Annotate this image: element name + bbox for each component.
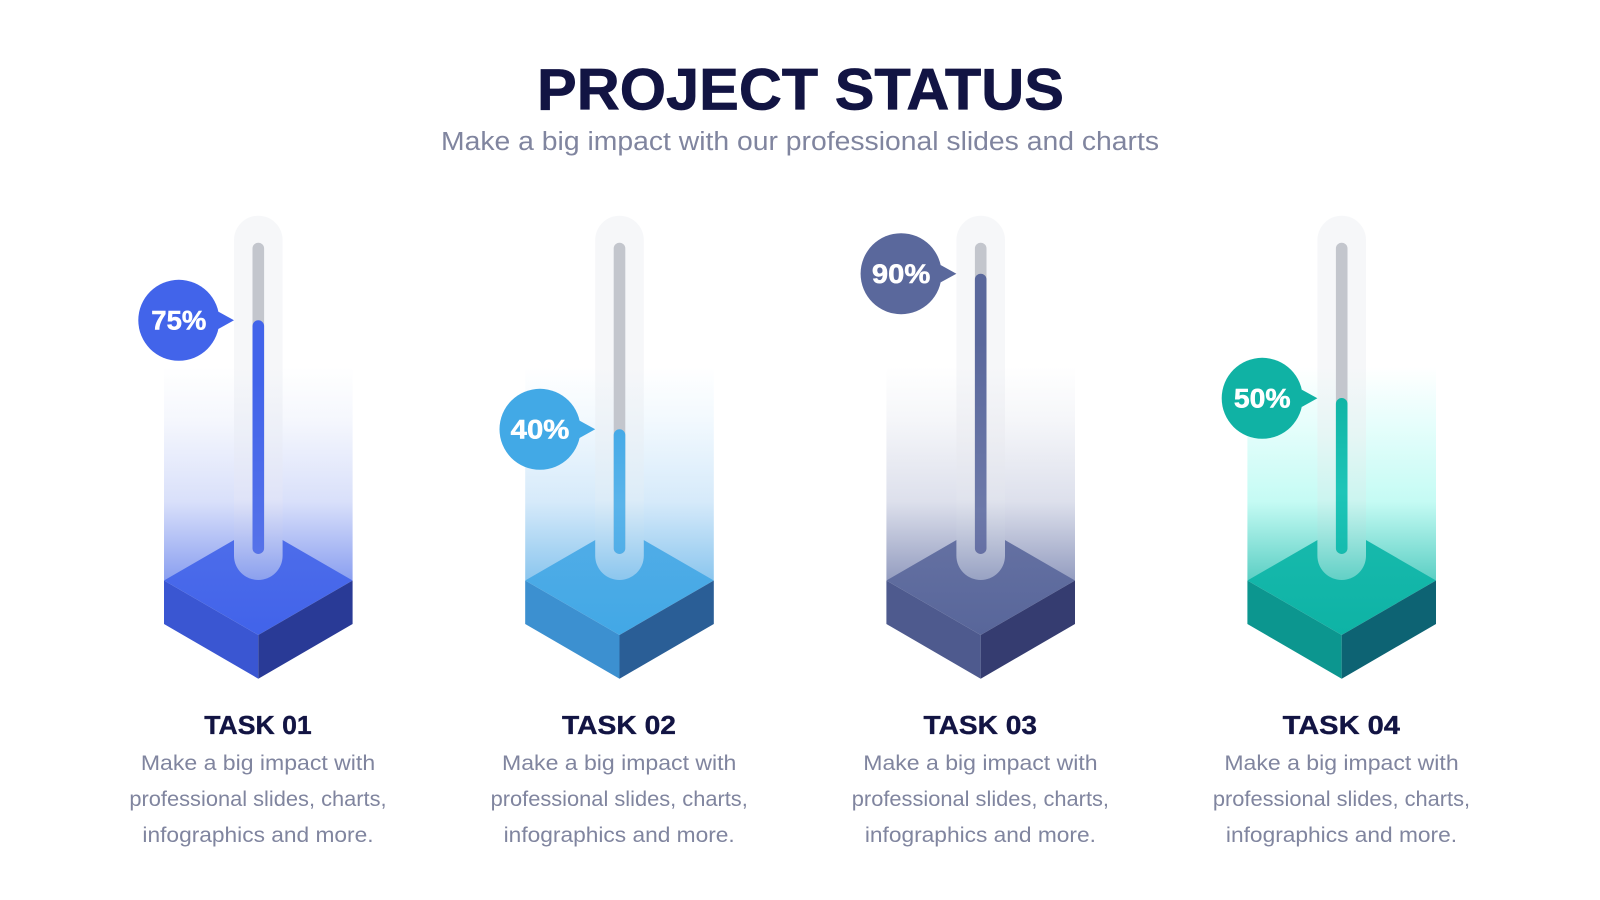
task description: professional slides, charts, — [491, 788, 748, 811]
task heading: TASK 01 — [204, 712, 312, 740]
task description: infographics and more. — [865, 824, 1096, 847]
task description: professional slides, charts, — [129, 788, 387, 811]
task description: infographics and more. — [1226, 824, 1457, 847]
task description: professional slides, charts, — [1213, 788, 1470, 811]
panel: task 04 — [1213, 216, 1470, 847]
isometric base — [164, 526, 353, 679]
progress fill 75% — [252, 320, 264, 554]
progress track — [252, 243, 264, 554]
task description: professional slides, charts, — [852, 788, 1109, 811]
task description: infographics and more. — [504, 824, 735, 847]
subtitle: Make a big impact with our professional slides and charts — [441, 128, 1159, 156]
task description: Make a big impact with — [502, 752, 736, 775]
glow column — [886, 367, 1075, 580]
panel: task 03 — [852, 216, 1109, 847]
task description: Make a big impact with — [1224, 752, 1459, 775]
thermometer tube — [234, 216, 283, 580]
task heading: TASK 04 — [1283, 712, 1401, 740]
task heading: TASK 02 — [562, 712, 676, 740]
callout 90%: 90% — [872, 259, 930, 289]
callout 40%: 40% — [511, 414, 569, 444]
glow column — [525, 367, 714, 580]
callout 50% — [1222, 358, 1317, 439]
thermometer tube — [956, 216, 1005, 580]
callout 90% — [861, 233, 956, 314]
glow column — [164, 367, 353, 580]
progress fill 90% — [975, 274, 986, 554]
progress fill 50% — [1336, 398, 1348, 554]
panel: task 02 — [491, 216, 748, 847]
progress track — [614, 243, 625, 554]
task description: Make a big impact with — [141, 752, 375, 775]
glow column — [1247, 367, 1436, 580]
progress fill 40% — [614, 429, 625, 554]
task description — [129, 752, 387, 847]
task description — [1213, 752, 1470, 847]
callout 75% — [138, 280, 234, 361]
thermometer tube — [1317, 216, 1366, 580]
task description: Make a big impact with — [863, 752, 1098, 775]
callout 75%: 75% — [151, 306, 206, 336]
isometric base — [886, 526, 1075, 679]
title: PROJECT STATUS — [537, 58, 1064, 122]
panel: task 01 — [129, 216, 387, 847]
progress track — [1336, 243, 1348, 554]
progress track — [975, 243, 986, 554]
isometric base — [525, 526, 714, 679]
task description — [852, 752, 1109, 847]
task description — [491, 752, 748, 847]
callout 40% — [500, 389, 595, 470]
thermometer tube — [595, 216, 644, 580]
isometric base — [1247, 526, 1436, 679]
task heading: TASK 03 — [924, 712, 1037, 740]
callout 50%: 50% — [1234, 384, 1291, 414]
task description: infographics and more. — [142, 824, 374, 847]
